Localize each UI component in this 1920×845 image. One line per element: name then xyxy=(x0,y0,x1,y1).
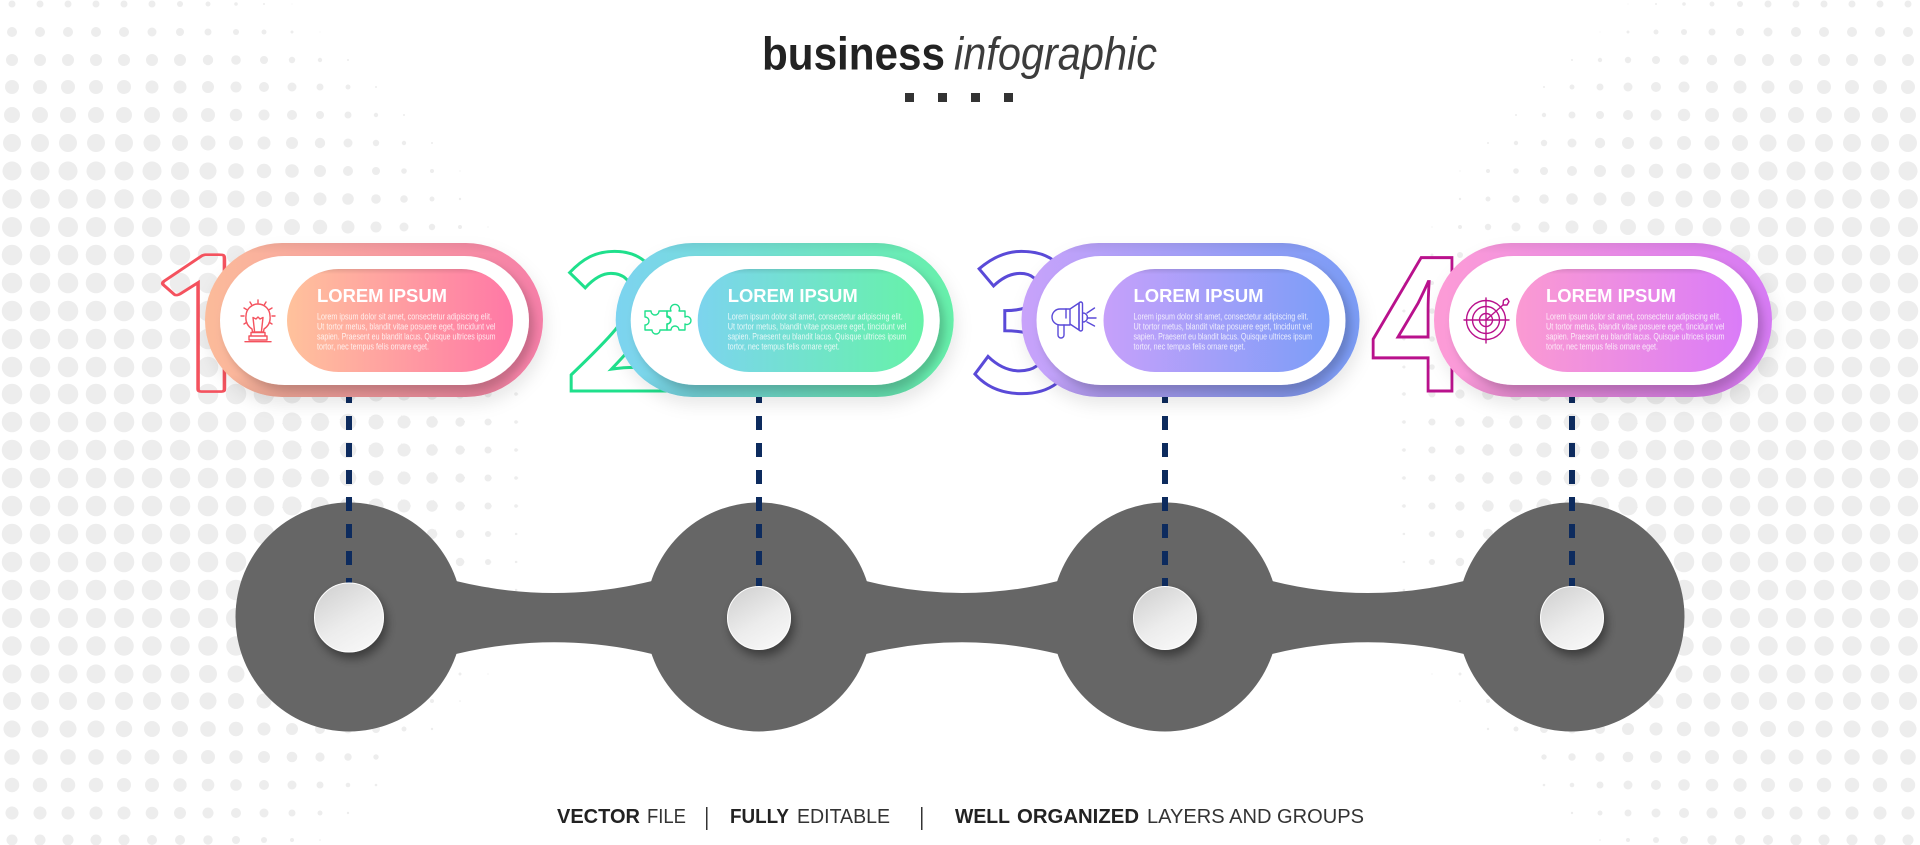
number 3: 3 xyxy=(970,171,1082,446)
panel: step 4: Ut tortor metus, blandit vitae posuere eget, tincidunt vel xyxy=(1546,322,1724,332)
footer caption: VECTOR xyxy=(557,806,641,828)
panel: step 3: sapien. Praesent eu blandit lacus. Quisque ultrices ipsum xyxy=(1134,332,1312,342)
panel: step 1: sapien. Praesent eu blandit lacus. Quisque ultrices ipsum xyxy=(317,332,496,342)
icon: puzzle xyxy=(645,304,691,334)
panel: step 4: sapien. Praesent eu blandit lacus. Quisque ultrices ipsum xyxy=(1546,332,1724,342)
panel: step 1: tortor, nec tempus felis ornare eget. xyxy=(317,342,429,352)
panel: step 2: LOREM IPSUM xyxy=(728,285,858,306)
footer caption: FILE xyxy=(647,806,686,828)
dashed connectors xyxy=(349,389,1572,590)
footer caption xyxy=(557,806,1364,830)
panel: step 1: LOREM IPSUM xyxy=(317,285,447,306)
panel: step 1 xyxy=(205,243,543,397)
panel: step 3 xyxy=(1022,243,1360,397)
panel: step 3: LOREM IPSUM xyxy=(1134,285,1264,306)
number 4: 4 xyxy=(1370,177,1472,445)
panel: step 1: Lorem ipsum dolor sit amet, consectetur adipiscing elit. xyxy=(317,312,492,322)
footer caption: EDITABLE xyxy=(797,806,890,828)
footer caption: WELL xyxy=(955,806,1010,828)
icon: target xyxy=(1464,298,1509,343)
timeline shape xyxy=(236,502,1684,732)
number 1: 1 xyxy=(131,240,280,419)
panel: step 2: sapien. Praesent eu blandit lacus. Quisque ultrices ipsum xyxy=(728,332,906,342)
icon: light bulb xyxy=(241,300,275,342)
panel: step 2: Lorem ipsum dolor sit amet, consectetur adipiscing elit. xyxy=(728,312,903,322)
panel: step 1: Ut tortor metus, blandit vitae posuere eget, tincidunt vel xyxy=(317,322,496,332)
footer caption: LAYERS AND GROUPS xyxy=(1147,806,1364,828)
title: business xyxy=(762,28,945,80)
panel: step 2: Ut tortor metus, blandit vitae posuere eget, tincidunt vel xyxy=(728,322,906,332)
panel: step 3: Ut tortor metus, blandit vitae posuere eget, tincidunt vel xyxy=(1134,322,1312,332)
title: infographic xyxy=(954,28,1157,80)
footer caption: ORGANIZED xyxy=(1017,806,1139,828)
panel: step 3: Lorem ipsum dolor sit amet, consectetur adipiscing elit. xyxy=(1134,312,1308,322)
panel: step 4: tortor, nec tempus felis ornare eget. xyxy=(1546,342,1658,352)
title xyxy=(762,28,1157,80)
number 2: 2 xyxy=(563,171,675,446)
panel: step 2: tortor, nec tempus felis ornare eget. xyxy=(728,342,840,352)
icon: megaphone xyxy=(1052,302,1096,338)
panel: step 2 xyxy=(616,243,954,397)
timeline discs xyxy=(314,583,1604,652)
panel: step 4 xyxy=(1434,243,1772,397)
panel: step 4: LOREM IPSUM xyxy=(1546,285,1676,306)
footer caption: FULLY xyxy=(730,806,790,828)
panel: step 3: tortor, nec tempus felis ornare eget. xyxy=(1134,342,1246,352)
panel: step 4: Lorem ipsum dolor sit amet, consectetur adipiscing elit. xyxy=(1546,312,1721,322)
title dots xyxy=(905,93,1013,102)
